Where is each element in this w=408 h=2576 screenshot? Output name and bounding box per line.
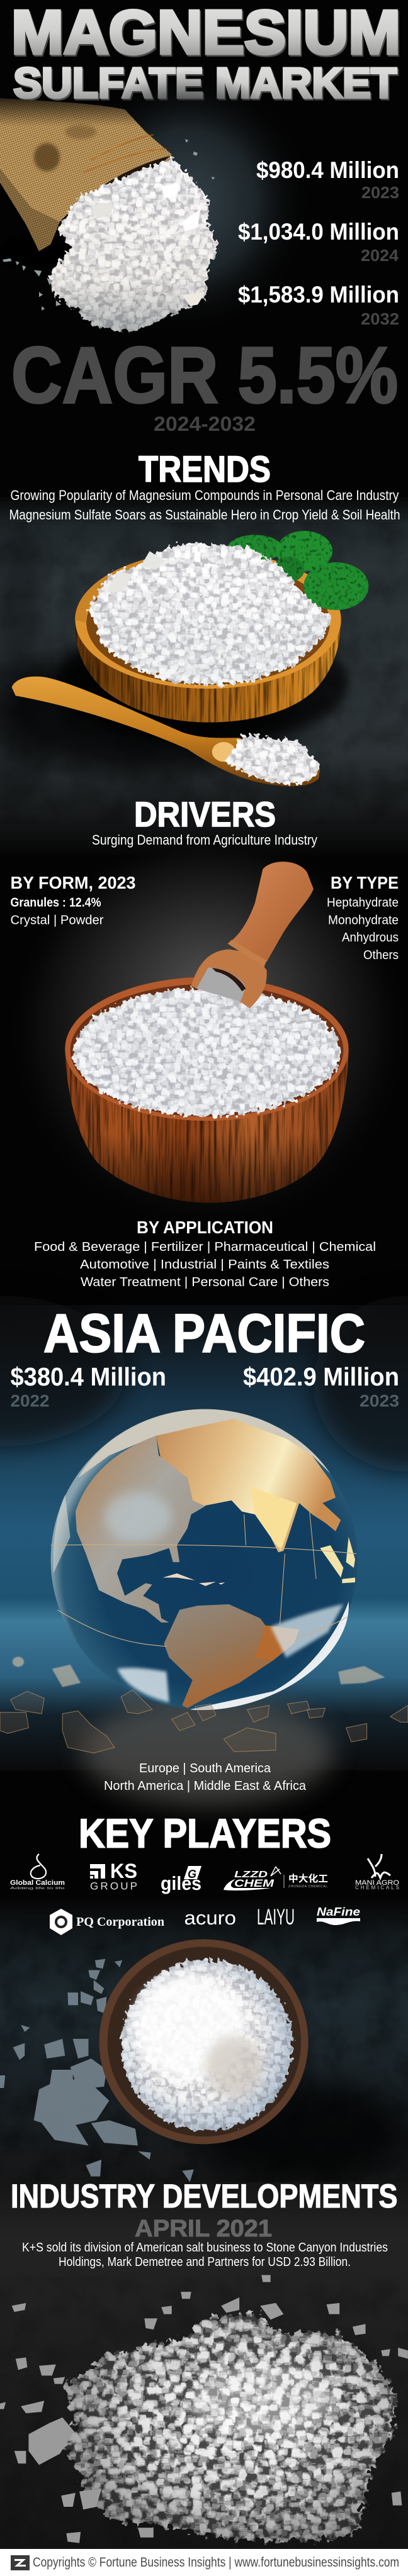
text: trends list <box>9 487 400 523</box>
stat: 2023 value: 2023 <box>361 183 399 202</box>
heading: key players: KEY PLAYERS <box>79 1810 331 1857</box>
logo: KS Group: KS <box>110 1860 137 1882</box>
text: development detail: Holdings, Mark Demetree and Partners for USD 2.93 Billion. <box>59 2255 351 2269</box>
image: salt crystal pile <box>0 2275 408 2543</box>
logo: giles: G <box>188 1868 196 1880</box>
image: dark bowl of magnesium flakes <box>0 1939 309 2182</box>
logo: giles: giles <box>161 1872 201 1894</box>
crystals around globe base <box>0 1690 408 1753</box>
text: by type: Anhydrous <box>342 931 399 945</box>
logo: Laiyu: LAIYU <box>257 1905 295 1929</box>
logo: Global Calcium: Global Calcium <box>10 1879 65 1887</box>
image: glass globe <box>0 1409 408 1753</box>
text: other regions: Europe | South America <box>139 1762 271 1775</box>
land: north america <box>76 1436 205 1623</box>
logo: LZZD Chem Zhongda: LZZD <box>234 1869 268 1880</box>
loose flakes <box>0 1959 194 2182</box>
text: by type: Monohydrate <box>328 913 399 927</box>
icon: fortune business insights logo <box>11 2555 30 2570</box>
stat: 2023 value <box>256 157 399 202</box>
logo: KS Group: GROUP <box>90 1880 137 1892</box>
logo: Global Calcium <box>10 1854 65 1890</box>
logo: LZZD Chem Zhongda: ZHONGDA CHEMICAL <box>288 1885 327 1889</box>
icon: mint leaves <box>228 531 369 610</box>
text: other regions <box>104 1762 307 1793</box>
image: burlap sack spilling salt <box>0 70 312 334</box>
heading: asia pacific: ASIA PACIFIC <box>43 1303 365 1363</box>
stat: 2023 value: $980.4 Million <box>256 157 399 183</box>
panel: asia pacific background <box>0 1296 408 1805</box>
text: drivers: Surging Demand from Agriculture Industry <box>92 832 317 848</box>
text: by form: Crystal | Powder <box>10 913 104 927</box>
text: by form <box>10 873 136 927</box>
text: by type: BY TYPE <box>331 873 399 892</box>
title: SULFATE MARKET <box>13 59 397 107</box>
text: by type: Others <box>363 948 399 962</box>
stat: 2032 value <box>238 282 399 328</box>
stat: 2032 value: $1,583.9 Million <box>238 282 399 308</box>
text: by application: Water Treatment | Personal Care | Others <box>81 1275 329 1289</box>
upper polar land <box>78 1409 331 1478</box>
text: by form: Granules : 12.4% <box>10 896 101 909</box>
logo: LZZD Chem Zhongda: 中大化工 <box>288 1873 328 1884</box>
text: other regions: North America | Middle East & Africa <box>104 1779 307 1793</box>
text: by application <box>34 1218 376 1289</box>
stat: 2024 value <box>238 219 399 265</box>
text: by application: Food & Beverage | Fertilizer | Pharmaceutical | Chemical <box>34 1240 376 1254</box>
stat: asia pacific 2023: $402.9 Million <box>243 1362 399 1391</box>
image: wood bowl with scoop on grey glow <box>0 830 408 1233</box>
image: wooden bowl of salt with mint and spoon <box>12 531 369 786</box>
icon: wooden spoon <box>12 677 321 786</box>
stat: asia pacific 2023: 2023 <box>360 1391 399 1410</box>
land: south america <box>164 1604 299 1708</box>
stat: 2024 value: 2024 <box>361 246 399 265</box>
stat: asia pacific 2022: 2022 <box>10 1391 49 1410</box>
logo: NaFine <box>317 1906 360 1925</box>
footer <box>0 2549 408 2576</box>
logo: Mani Agro Chemicals: MANI AGRO <box>355 1879 399 1887</box>
panel: trends background <box>0 497 408 855</box>
text: by type: Heptahydrate <box>327 896 399 909</box>
land: southeast asia <box>320 1537 355 1583</box>
stat: 2032 value: 2032 <box>361 309 399 328</box>
icon: wooden scoop <box>191 862 314 1008</box>
text: by application: BY APPLICATION <box>137 1218 273 1237</box>
text: by type <box>327 873 399 962</box>
logo: LZZD Chem Zhongda <box>224 1867 328 1890</box>
logo: NaFine: NaFine <box>317 1906 360 1918</box>
heading: drivers: DRIVERS <box>134 794 276 834</box>
logo: Global Calcium: Adding life to life <box>10 1887 65 1890</box>
glass glare <box>190 1601 349 1710</box>
date: april 2021: APRIL 2021 <box>135 2216 272 2242</box>
logo: KS Group <box>90 1860 137 1892</box>
text: by application: Automotive | Industrial | Paints & Textiles <box>80 1258 329 1272</box>
logo: PQ Corporation: PQ Corporation <box>76 1915 164 1929</box>
panel: industry developments background <box>0 2182 408 2549</box>
panel: slate backdrop <box>0 1899 408 2195</box>
logo: PQ Corporation <box>50 1909 164 1935</box>
stat: asia pacific 2022: $380.4 Million <box>10 1362 166 1391</box>
stat: asia pacific 2022 <box>10 1362 166 1410</box>
text: by form: BY FORM, 2023 <box>10 873 136 892</box>
heading: trends: TRENDS <box>139 449 271 490</box>
land: eurasia <box>156 1419 341 1552</box>
logo: Mani Agro Chemicals <box>355 1854 399 1890</box>
logo: Mani Agro Chemicals: CHEMICALS <box>355 1885 399 1890</box>
stat: asia pacific 2023 <box>243 1362 399 1410</box>
logo: LZZD Chem Zhongda: CHEM <box>234 1877 275 1889</box>
stat: 2024 value: $1,034.0 Million <box>238 219 399 245</box>
text: development detail <box>22 2241 388 2269</box>
CAGR callout: 2024-2032 <box>154 413 256 435</box>
title <box>11 0 400 107</box>
logo: acuro: acuro <box>184 1907 236 1929</box>
